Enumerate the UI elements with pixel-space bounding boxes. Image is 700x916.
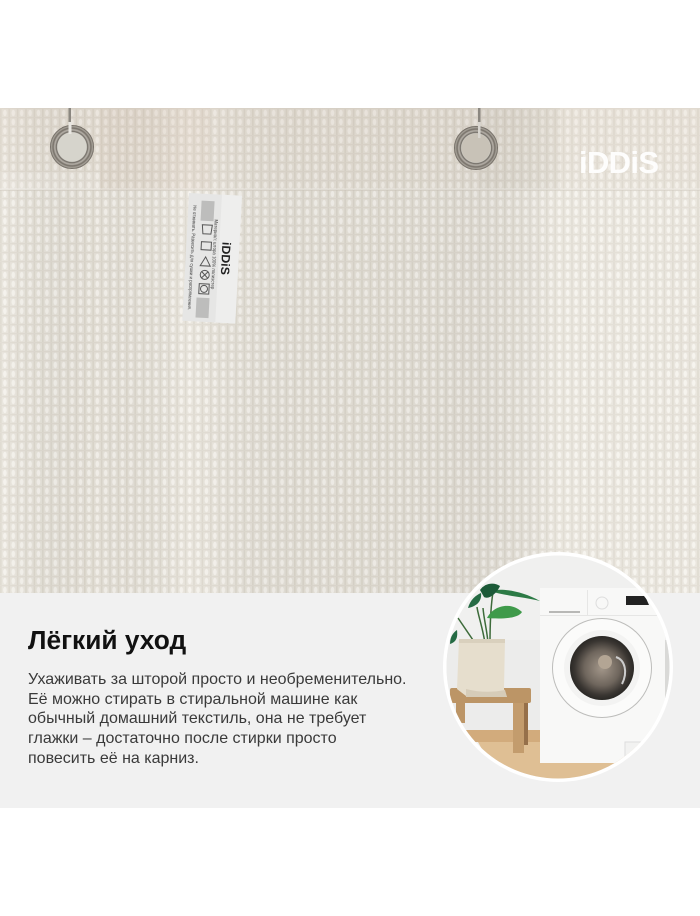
label text: material: Материал: штора 100% полиэстер (209, 219, 219, 290)
text block: Ухаживать за шторой просто и необременительно. (28, 671, 406, 688)
care icons (199, 225, 212, 294)
text block: глажки – достаточно после стирки просто (28, 730, 337, 747)
wall (450, 556, 666, 748)
washing machine (540, 588, 671, 763)
text block (28, 671, 406, 767)
label text: care note: Не отжимать. Развесить для сушки и распрямления. (186, 205, 197, 310)
header hem band (0, 108, 700, 191)
label text: brand: iDDiS (218, 242, 233, 275)
heading: Лёгкий уход (28, 625, 186, 655)
text block: Её можно стирать в стиральной машине как (28, 691, 357, 708)
fabric bag (457, 639, 507, 697)
plant (450, 584, 540, 644)
grommet: right with hook (454, 108, 498, 170)
floor (466, 730, 637, 778)
logo: iddis: iDDiS (579, 145, 659, 180)
stool (450, 688, 531, 753)
panel: easy care text (0, 593, 700, 808)
photo: waffle-weave curtain with grommets, label and logo (0, 108, 700, 593)
text block: обычный домашний текстиль, она не требует (28, 710, 366, 727)
circle photo: washing machine, stool and plant (443, 552, 673, 782)
grommet: left with hook (50, 108, 94, 169)
text block: повесить её на карниз. (28, 750, 199, 767)
sewn care label (182, 193, 242, 324)
